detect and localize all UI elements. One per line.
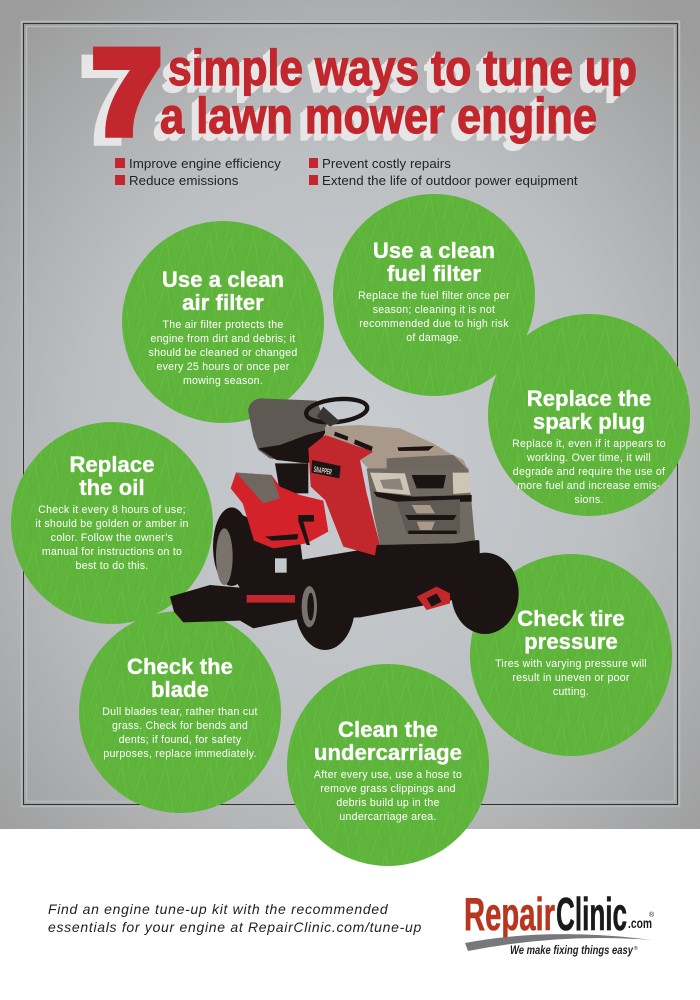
- panel: replace the oil: the oil: [79, 475, 145, 500]
- deck and chassis: [170, 540, 480, 628]
- rear chassis: [235, 513, 307, 593]
- panel: use a clean air filter: The air filter protects the: [163, 319, 283, 331]
- panel: use a clean fuel filter: season; cleaning it is not: [373, 304, 495, 316]
- rear fender: [231, 473, 328, 548]
- benefits list: Prevent costly repairs: [322, 156, 451, 171]
- decorative frame: [22, 22, 680, 806]
- panel: use a clean fuel filter: fuel filter: [387, 261, 481, 286]
- panel: check the blade: Dull blades tear, rather than cut: [102, 706, 258, 718]
- panel: replace the oil: Replace: [69, 452, 155, 477]
- footer panel: [0, 829, 700, 1000]
- benefits list: Improve engine efficiency: [129, 156, 281, 171]
- seat: [248, 398, 328, 463]
- RepairClinic logo: ®: [649, 911, 655, 919]
- panel: replace the spark plug: sions.: [574, 494, 604, 506]
- panel: clean the undercarriage: remove grass clippings and: [320, 783, 456, 795]
- RepairClinic logo: We make fixing things easy: [510, 945, 633, 957]
- brand badge: [311, 460, 341, 478]
- panel: use a clean fuel filter: Replace the fuel filter once per: [358, 290, 510, 302]
- panel: use a clean air filter: every 25 hours or once per: [156, 361, 290, 373]
- panel: check the blade: dents; if found, for safety: [119, 734, 242, 746]
- panel: use a clean air filter: engine from dirt and debris; it: [151, 333, 295, 345]
- illustration: riding lawn mower: [170, 396, 519, 650]
- panel: replace the spark plug: Replace the: [527, 386, 651, 411]
- panel: clean the undercarriage: After every use, use a hose to: [314, 769, 462, 781]
- benefits list: Extend the life of outdoor power equipment: [322, 173, 578, 188]
- front grille panel: [367, 468, 475, 545]
- RepairClinic logo: ®: [634, 945, 638, 952]
- bumper: [373, 541, 480, 580]
- panel: replace the spark plug: [488, 314, 690, 516]
- panel: clean the undercarriage: undercarriage area.: [339, 811, 437, 823]
- panel: replace the spark plug: working. Over time, it will: [526, 452, 651, 464]
- panel: check tire pressure: pressure: [524, 629, 618, 654]
- panel: replace the spark plug: degrade and require the use of: [513, 466, 665, 478]
- panel: replace the oil: Check it every 8 hours of use;: [38, 504, 186, 516]
- call to action text: [48, 901, 422, 935]
- illustration: riding lawn mower: SNAPPER: [313, 465, 333, 477]
- panel: replace the oil: [11, 422, 213, 624]
- panel: use a clean air filter: air filter: [182, 290, 264, 315]
- panel: use a clean fuel filter: Use a clean: [373, 238, 495, 263]
- panel: replace the oil: color. Follow the owner’s: [51, 532, 173, 544]
- panel: use a clean air filter: should be cleaned or changed: [149, 347, 297, 359]
- rear wheel: [213, 507, 250, 586]
- RepairClinic logo: [464, 888, 655, 957]
- panel: check the blade: grass. Check for bends and: [112, 720, 248, 732]
- panel: use a clean air filter: Use a clean: [162, 267, 284, 292]
- panel: replace the spark plug: more fuel and increase emis-: [517, 480, 661, 492]
- panel: clean the undercarriage: [287, 664, 489, 866]
- panel: clean the undercarriage: undercarriage: [314, 740, 462, 765]
- panel: check tire pressure: result in uneven or poor: [512, 672, 630, 684]
- steering wheel: [305, 396, 368, 425]
- numeral 7: 7: [93, 28, 161, 159]
- benefits list: [115, 156, 578, 188]
- panel: check the blade: [79, 611, 281, 813]
- panel: use a clean fuel filter: [333, 194, 535, 396]
- panel: replace the spark plug: Replace it, even if it appears to: [512, 438, 666, 450]
- front right wheel: [451, 553, 519, 634]
- red side panel: [308, 435, 380, 556]
- panel: check the blade: blade: [151, 677, 209, 702]
- panel: clean the undercarriage: Clean the: [338, 717, 438, 742]
- call to action text: Find an engine tune-up kit with the recommended: [48, 901, 389, 917]
- panel: replace the oil: best to do this.: [76, 560, 148, 572]
- panel: replace the oil: it should be golden or amber in: [35, 518, 189, 530]
- headlights: [370, 473, 411, 495]
- panel: replace the spark plug: spark plug: [533, 409, 645, 434]
- panel: check tire pressure: cutting.: [553, 686, 589, 698]
- call to action text: essentials for your engine at RepairClinic.com/tune-up: [48, 919, 422, 935]
- panel: use a clean fuel filter: recommended due to high risk: [359, 318, 509, 330]
- RepairClinic logo: Clinic: [556, 888, 627, 940]
- panel: check tire pressure: Check tire: [517, 606, 625, 631]
- panel: check tire pressure: [470, 554, 672, 756]
- hood: [325, 425, 468, 470]
- RepairClinic logo: Repair: [464, 888, 555, 940]
- panel: use a clean air filter: mowing season.: [183, 375, 263, 387]
- RepairClinic logo: .com: [628, 915, 652, 931]
- panel: check the blade: purposes, replace immediately.: [103, 748, 257, 760]
- panel: clean the undercarriage: debris build up in the: [336, 797, 440, 809]
- panel: use a clean fuel filter: of damage.: [406, 332, 462, 344]
- panel: use a clean air filter: [122, 221, 324, 423]
- logo swoosh: [465, 934, 652, 951]
- panel: check tire pressure: Tires with varying pressure will: [495, 658, 647, 670]
- title: [93, 28, 637, 159]
- title line 2: a lawn mower engine: [160, 88, 597, 144]
- panel: check the blade: Check the: [127, 654, 233, 679]
- front left wheel: [295, 560, 355, 650]
- panel: replace the oil: manual for instructions on to: [42, 546, 182, 558]
- benefits list: Reduce emissions: [129, 173, 239, 188]
